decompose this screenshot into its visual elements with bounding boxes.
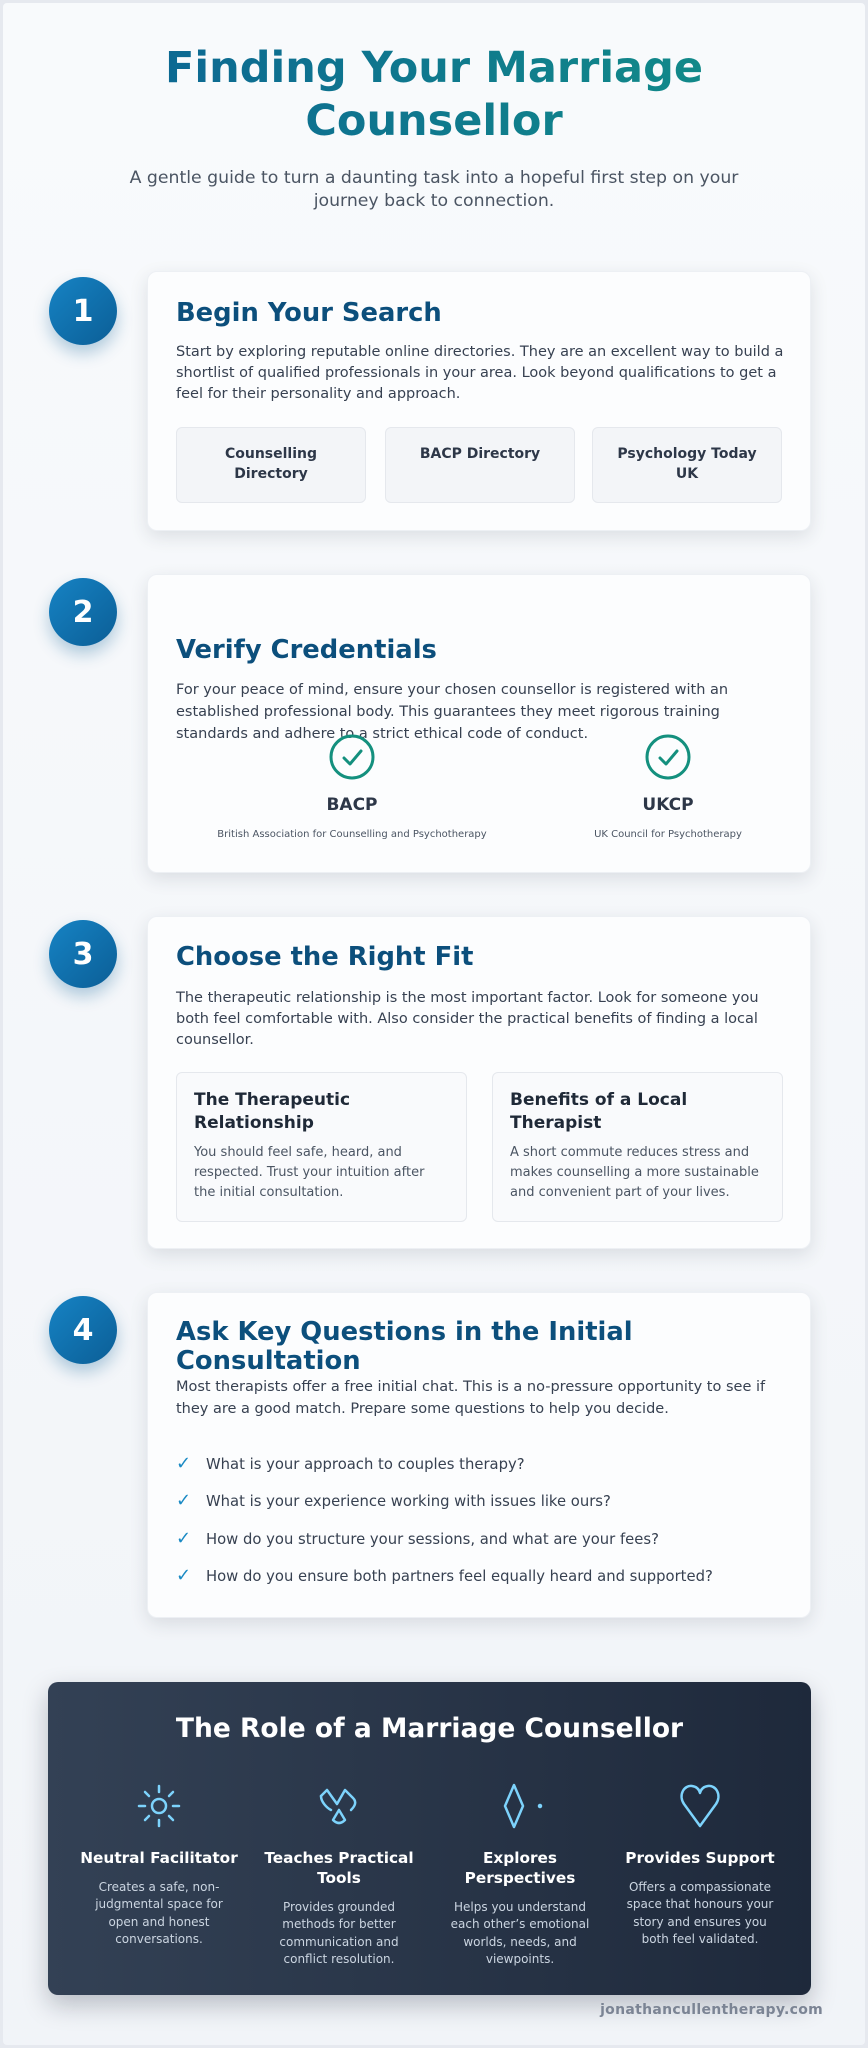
icon: diamond xyxy=(504,1784,542,1828)
directory: counselling directory: Directory xyxy=(234,466,308,482)
question 1: ✓ xyxy=(176,1453,191,1474)
panel: begin your search xyxy=(147,271,811,531)
footer credit: jonathancullentherapy.com xyxy=(600,2002,823,2018)
item: provides support: Offers a compassionate space that honours your story and ensures you both feel validated. xyxy=(627,1880,773,1946)
subtitle xyxy=(130,168,738,211)
panel: choose the right fit xyxy=(147,916,811,1249)
sub-panel: therapeutic relationship: You should feel safe, heard, and respected. Trust your intuition after the initial consultation. xyxy=(194,1145,424,1200)
title: Counsellor xyxy=(305,96,563,146)
step badge 4 xyxy=(49,1296,117,1364)
step badge 1 xyxy=(49,277,117,345)
credential: UKCP: UK Council for Psychotherapy xyxy=(594,829,742,840)
directory: BACP xyxy=(385,427,575,503)
item: neutral facilitator: Creates a safe, non-judgmental space for open and honest conversations. xyxy=(95,1880,223,1946)
credential: BACP xyxy=(217,734,487,840)
step badge 4: 4 xyxy=(73,1312,93,1348)
question 4: How do you ensure both partners feel equally heard and supported? xyxy=(206,1568,713,1585)
sub-panel: local therapist xyxy=(492,1072,783,1222)
step badge 3 xyxy=(49,920,117,988)
step badge 2 xyxy=(49,578,117,646)
text block: Start by exploring reputable online directories. They are an excellent way to build a shortlist of qualified professionals in your area. Look beyond qualifications to get a feel for their personality and approach. xyxy=(176,344,783,402)
step badge 1: 1 xyxy=(73,294,93,328)
directory: psychology today xyxy=(592,427,782,503)
icon: check circle xyxy=(646,734,690,780)
subtitle: journey back to connection. xyxy=(314,191,554,211)
credential: BACP: BACP xyxy=(326,795,378,815)
heading: Ask Key Questions in the Initial Consultation xyxy=(176,1317,633,1376)
text block: Most therapists offer a free initial chat. This is a no-pressure opportunity to see if they are a good match. Prepare some questions to help you decide. xyxy=(176,1379,765,1417)
panel: role of a marriage counsellor xyxy=(48,1682,811,1995)
icon: check circle xyxy=(330,734,374,780)
question 1: What is your approach to couples therapy? xyxy=(206,1456,525,1473)
credential: UKCP xyxy=(594,734,742,840)
step badge 2: 2 xyxy=(73,594,93,630)
heading: Begin Your Search xyxy=(176,298,442,328)
item: neutral facilitator xyxy=(80,1784,238,1946)
question 2: ✓ xyxy=(176,1490,191,1511)
icon: heart xyxy=(680,1784,720,1828)
item: provides support: Provides Support xyxy=(625,1849,775,1867)
item: neutral facilitator: Neutral Facilitator xyxy=(80,1849,238,1867)
icon: tools xyxy=(320,1788,356,1824)
question 2: What is your experience working with issues like ours? xyxy=(206,1493,611,1510)
directory: psychology today: Psychology Today xyxy=(617,446,757,462)
directory: counselling directory: Counselling xyxy=(225,446,317,462)
item: provides support xyxy=(625,1784,775,1946)
heading: Choose the Right Fit xyxy=(176,942,473,972)
question 3: ✓ xyxy=(176,1528,191,1549)
heading: The Role of a Marriage Counsellor xyxy=(176,1713,683,1744)
credential: UKCP: UKCP xyxy=(642,795,694,815)
directory: psychology today: UK xyxy=(676,466,698,482)
sub-panel: therapeutic relationship xyxy=(176,1072,467,1222)
text block: The therapeutic relationship is the most important factor. Look for someone you both feel comfortable with. Also consider the practical benefits of finding a local counsellor. xyxy=(176,990,759,1048)
directory: counselling directory xyxy=(176,427,366,503)
credential: BACP: British Association for Counselling and Psychotherapy xyxy=(217,829,487,840)
item: explores perspectives: Explores Perspectives xyxy=(465,1849,575,1887)
text block: For your peace of mind, ensure your chosen counsellor is registered with an established professional body. This guarantees they meet rigorous training standards and adhere to a strict ethical code of conduct. xyxy=(176,682,728,742)
sub-panel: local therapist: Benefits of a Local Therapist xyxy=(510,1090,687,1133)
item: practical tools xyxy=(264,1788,414,1966)
question list xyxy=(176,1453,713,1586)
step badge 3: 3 xyxy=(73,936,93,972)
question 4: ✓ xyxy=(176,1565,191,1586)
directory: BACP: BACP Directory xyxy=(420,446,540,462)
question 3: How do you structure your sessions, and what are your fees? xyxy=(206,1531,659,1548)
panel: key questions xyxy=(147,1292,811,1618)
title: Finding Your Marriage xyxy=(165,43,703,93)
heading: Verify Credentials xyxy=(176,635,437,665)
item: practical tools: Teaches Practical Tools xyxy=(264,1849,414,1887)
title xyxy=(0,42,868,148)
subtitle: A gentle guide to turn a daunting task into a hopeful first step on your xyxy=(130,168,738,188)
item: explores perspectives xyxy=(451,1784,589,1966)
panel: verify credentials xyxy=(147,574,811,873)
sub-panel: therapeutic relationship: The Therapeutic Relationship xyxy=(194,1090,350,1133)
item: practical tools: Provides grounded methods for better communication and conflict resolution. xyxy=(279,1900,399,1966)
item: explores perspectives: Helps you understand each other’s emotional worlds, needs, and viewpoints. xyxy=(451,1900,589,1966)
icon: sun xyxy=(138,1784,180,1828)
sub-panel: local therapist: A short commute reduces stress and makes counselling a more sustainable and convenient part of your lives. xyxy=(510,1145,759,1200)
